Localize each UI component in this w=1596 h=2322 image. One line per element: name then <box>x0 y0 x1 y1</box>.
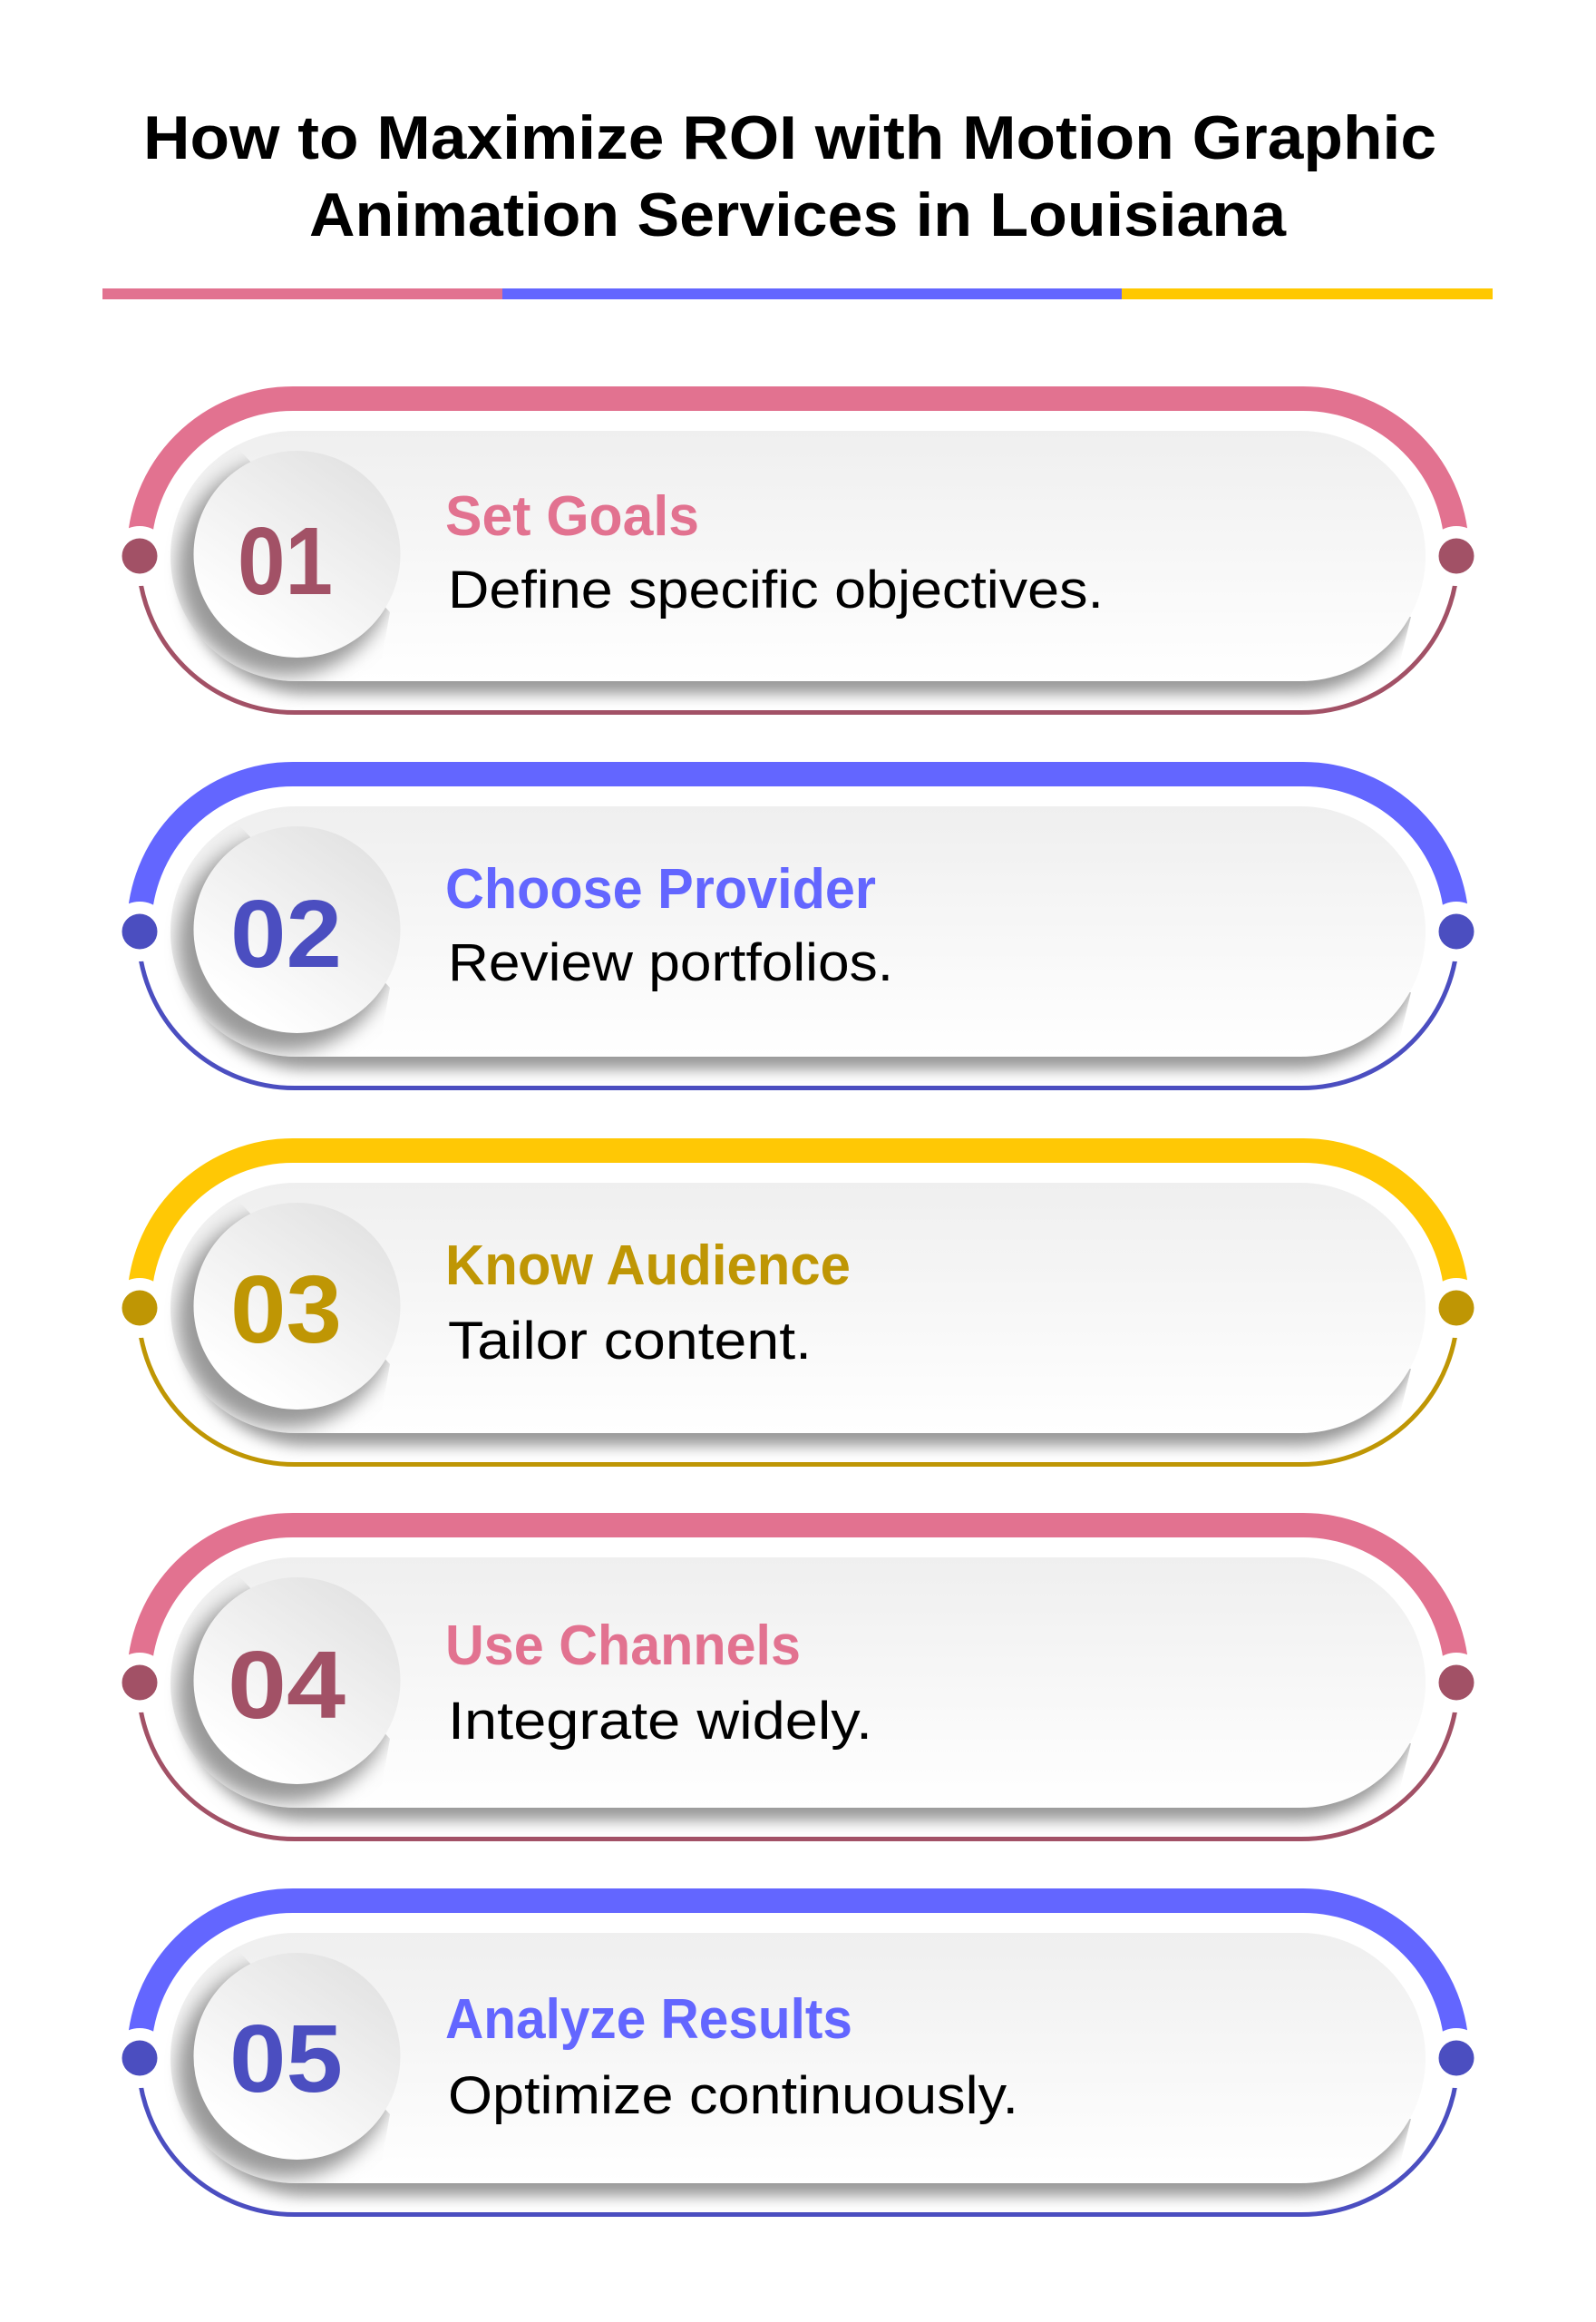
title <box>143 103 1436 249</box>
heading: Use Channels <box>445 1615 801 1677</box>
disc shadow <box>178 1212 394 1428</box>
pill shadow <box>172 2079 1411 2206</box>
disc shadow <box>178 460 394 676</box>
top arc <box>140 399 1456 580</box>
tricolour divider bar <box>102 288 1493 299</box>
right connector dot <box>1426 1653 1486 1712</box>
disc shadow <box>178 835 394 1051</box>
number disc <box>194 1953 401 2160</box>
number disc <box>194 451 401 658</box>
number disc <box>194 1577 401 1784</box>
number: 03 <box>230 1256 342 1363</box>
number: 04 <box>228 1632 345 1739</box>
description: Optimize continuously. <box>448 2066 1018 2125</box>
number: 02 <box>230 881 342 988</box>
panel: step 05 Analyze Results <box>110 1901 1486 2215</box>
description: Define specific objectives. <box>448 561 1104 620</box>
title: Animation Services in Louisiana <box>309 180 1287 249</box>
pill shadow <box>172 1703 1411 1830</box>
description: Review portfolios. <box>448 933 893 992</box>
bottom arc <box>138 1662 1458 1839</box>
description: Tailor content. <box>448 1312 812 1371</box>
bottom arc <box>138 1287 1458 1464</box>
top arc <box>140 1526 1456 1707</box>
panel: step 01 Set Goals <box>110 399 1486 713</box>
heading: Analyze Results <box>445 1988 852 2051</box>
bottom arc <box>138 2037 1458 2215</box>
pill card <box>170 1933 1426 2183</box>
panel: step 02 Choose Provider <box>110 775 1486 1088</box>
pill shadow <box>172 577 1411 704</box>
right connector dot <box>1426 1278 1486 1338</box>
bottom arc <box>138 911 1458 1088</box>
heading: Choose Provider <box>445 858 876 921</box>
left connector dot <box>110 2028 170 2088</box>
left connector dot <box>110 902 170 961</box>
top arc <box>140 1150 1456 1332</box>
heading: Know Audience <box>445 1234 851 1297</box>
heading: Set Goals <box>445 485 699 548</box>
right connector dot <box>1426 526 1486 586</box>
number disc <box>194 1203 401 1410</box>
title: How to Maximize ROI with Motion Graphic <box>143 103 1436 172</box>
left connector dot <box>110 1653 170 1712</box>
top arc <box>140 1901 1456 2083</box>
number disc <box>194 826 401 1033</box>
left connector dot <box>110 1278 170 1338</box>
left connector dot <box>110 526 170 586</box>
panel: step 04 Use Channels <box>110 1526 1486 1839</box>
right connector dot <box>1426 902 1486 961</box>
top arc <box>140 775 1456 956</box>
disc shadow <box>178 1962 394 2178</box>
pill shadow <box>172 1329 1411 1455</box>
panel: step 03 Know Audience <box>110 1150 1486 1464</box>
number: 05 <box>229 2005 343 2112</box>
pill shadow <box>172 952 1411 1079</box>
right connector dot <box>1426 2028 1486 2088</box>
pill card <box>170 1557 1426 1808</box>
description: Integrate widely. <box>448 1692 872 1751</box>
pill card <box>170 806 1426 1057</box>
disc shadow <box>178 1586 394 1802</box>
pill card <box>170 431 1426 681</box>
bottom arc <box>138 535 1458 713</box>
pill card <box>170 1183 1426 1433</box>
number: 01 <box>238 508 333 615</box>
